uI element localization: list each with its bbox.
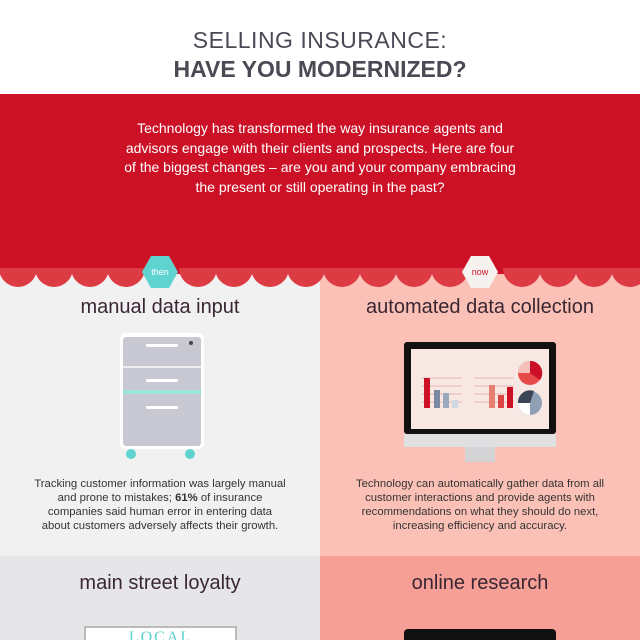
intro text: of the biggest changes – are you and your company embracing [124,159,516,175]
panel: online research [320,556,640,640]
panel: main street loyalty [0,556,320,640]
text: then description: Tracking customer information was largely manual [34,478,286,490]
icon: local sign [84,626,237,640]
heading: automated data collection: automated data collection [366,296,594,318]
heading: manual data input: manual data input [80,296,240,318]
scallop edge [0,268,640,287]
intro text: advisors engage with their clients and prospects. Here are four [126,140,514,156]
title [173,27,467,82]
text: then description: about customers adversely affects their growth. [42,520,278,532]
red intro band [0,94,640,274]
text: now description: customer interactions and provide agents with [365,492,595,504]
title: HAVE YOU MODERNIZED? [173,56,467,82]
badge: now [462,256,498,288]
badge: now: now [472,267,489,277]
intro text: Technology has transformed the way insurance agents and [137,120,503,136]
intro text: the present or still operating in the past? [195,178,445,194]
icon: filing cabinet [120,333,204,459]
icon: device [404,629,556,640]
panel: online research: online research [412,572,548,594]
panel: then background [0,274,320,556]
text: now description: Technology can automatically gather data from all [356,478,604,490]
text: now description [356,478,604,532]
text: then description [34,478,286,532]
text: then description: companies said human error in entering data [48,506,272,518]
text: now description: increasing efficiency and accuracy. [393,520,567,532]
badge: then: then [151,267,169,277]
badge: then [142,256,178,288]
text: then description: and prone to mistakes; 61% of insurance [58,492,262,504]
title: SELLING INSURANCE: [193,27,447,53]
panel: main street loyalty: main street loyalty [79,572,241,594]
icon: monitor with charts [404,342,556,462]
text: now description: recommendations on what they should do next, [362,506,598,518]
panel: now background [320,274,640,556]
intro text [124,120,516,195]
